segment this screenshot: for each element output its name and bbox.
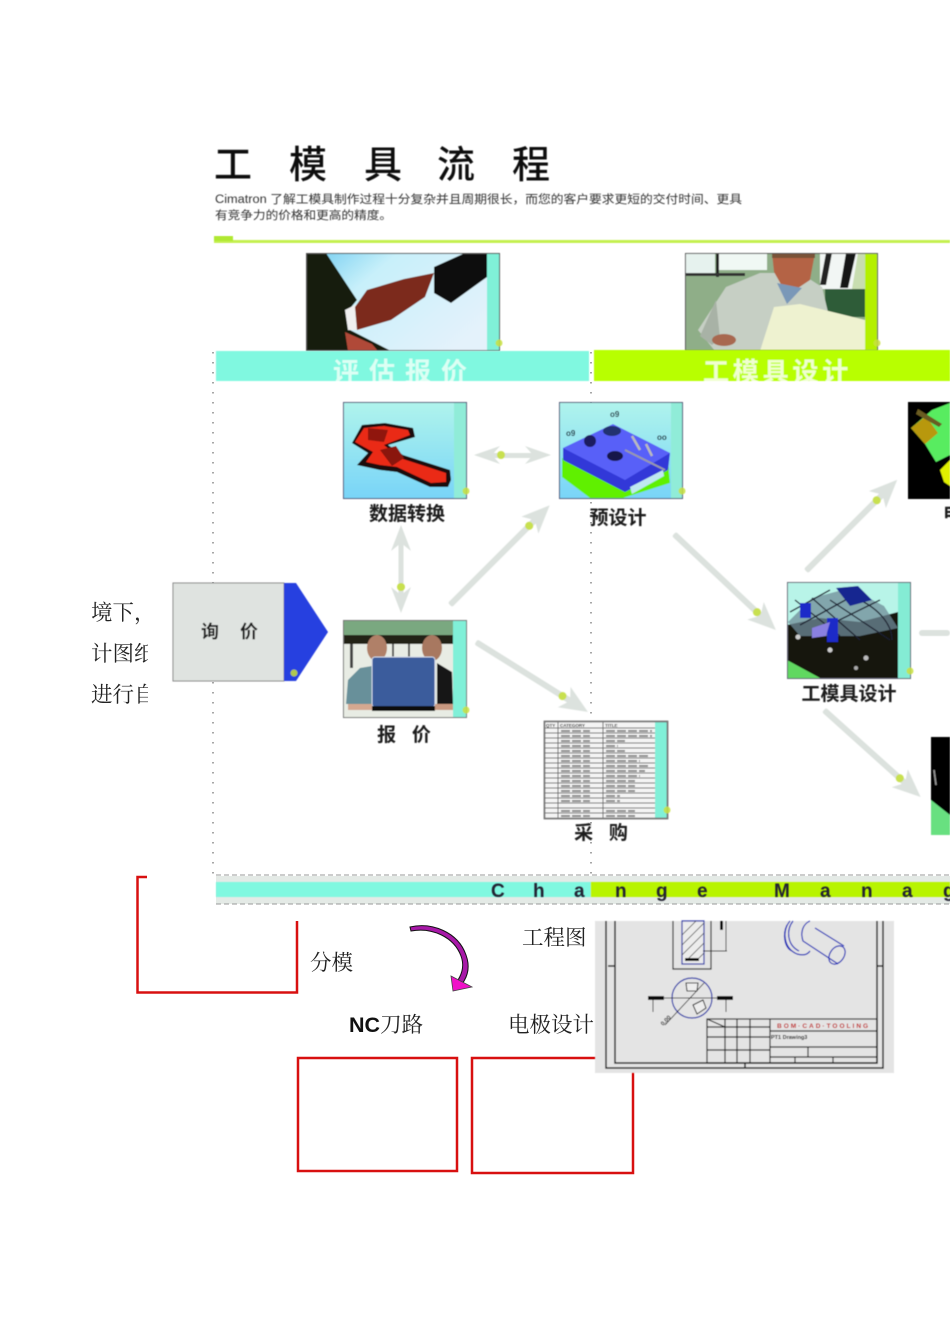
inquiry pentagon: 价 xyxy=(240,622,258,642)
arrow: quote to purchase xyxy=(470,632,594,722)
change management bar: M xyxy=(774,881,790,902)
thumbnail: quotation xyxy=(343,620,470,718)
inquiry body xyxy=(173,583,284,681)
label: mold design: 工模具设计 xyxy=(801,683,897,705)
change management bar: a xyxy=(820,881,831,902)
title: 流 xyxy=(437,145,475,187)
body text fragment left: 计图纸 xyxy=(91,642,156,666)
title: 工 xyxy=(214,145,252,187)
title: 具 xyxy=(364,145,402,187)
isometric bolt view xyxy=(785,921,848,967)
change management bar: e xyxy=(697,881,708,902)
thumbnail: predesign: o9 xyxy=(610,410,620,419)
body text fragment left: 进行自 xyxy=(91,683,156,707)
phase bar: mold design: 工模具设计 xyxy=(703,357,852,387)
thumbnail: data conversion xyxy=(343,402,470,499)
red frame: electrode design xyxy=(472,1058,633,1173)
engineering drawing sheet: BOM·CAD·TOOLING xyxy=(777,1023,870,1030)
red frame: top left xyxy=(138,877,297,992)
thumbnail: lower step, cropped xyxy=(931,737,950,835)
thumbnail: purchasing table xyxy=(544,721,670,819)
thumbnail: purchasing table: CATEGORY xyxy=(560,723,585,728)
change management bar: n xyxy=(615,881,627,902)
title block xyxy=(707,1019,877,1063)
label: predesign: 预设计 xyxy=(589,507,647,529)
photo: handshake xyxy=(306,253,502,351)
inquiry blue arrow tip xyxy=(284,583,328,681)
label: purchasing: 采 购 xyxy=(574,822,628,844)
change management bar xyxy=(216,875,950,904)
phase bar: quotation xyxy=(215,350,590,382)
engineering drawing sheet xyxy=(595,921,894,1073)
thumbnail: purchasing table: TITLE xyxy=(605,723,618,728)
change management bar: h xyxy=(533,881,545,902)
thumbnail: predesign: o9 xyxy=(566,429,576,438)
title: 模 xyxy=(289,145,327,187)
arrow: data to predesign xyxy=(474,446,551,464)
title xyxy=(214,145,550,187)
change management bar: g xyxy=(656,881,668,902)
label: quotation: 报 价 xyxy=(377,724,431,746)
arrow: quote to predesign xyxy=(442,497,558,613)
engineering drawing sheet: PT1 Drawing3 xyxy=(771,1035,807,1041)
photo: designer at computer xyxy=(685,253,880,351)
intro text: Cimatron 了解工模具制作过程十分复杂并且周期很长，而您的客户要求更短的交付时间、更具 xyxy=(215,192,743,206)
change management bar: n xyxy=(861,881,873,902)
dotted phase dividers xyxy=(213,352,591,875)
title: 程 xyxy=(512,145,550,187)
phase bar: mold design xyxy=(593,349,950,382)
change management bar: a xyxy=(902,881,913,902)
section view xyxy=(673,921,727,969)
change management bar: C xyxy=(491,881,505,902)
label: electrode design: 电极设计 xyxy=(508,1013,594,1037)
inquiry pentagon: 询 xyxy=(201,622,219,642)
curved magenta arrow xyxy=(410,926,472,991)
label: NC toolpath: NC刀路 xyxy=(349,1013,423,1037)
arrow: mold design to right xyxy=(919,630,950,636)
label: parting: 分模 xyxy=(310,951,354,975)
thumbnail: predesign xyxy=(559,402,686,499)
circular detail view xyxy=(648,978,733,1027)
arrow: mold design to electrode xyxy=(798,471,906,579)
thumbnail: predesign: oo xyxy=(657,433,667,442)
body text fragment left xyxy=(92,602,148,704)
label: data conversion: 数据转换 xyxy=(369,503,445,525)
thumbnail: electrode, cropped xyxy=(908,402,950,499)
label: engineering drawing: 工程图 xyxy=(522,926,587,950)
thumbnail: mold design xyxy=(787,582,914,679)
red frame: NC toolpath xyxy=(298,1058,457,1171)
arrow: mold design to lower step xyxy=(816,701,929,806)
change management bar: a xyxy=(574,881,585,902)
thumbnail: purchasing table: QTY xyxy=(546,723,555,728)
phase bar: quotation: 评估报价 xyxy=(333,357,477,387)
arrow: data and quote xyxy=(391,525,411,613)
body text fragment left: 境下， xyxy=(91,601,156,626)
inquiry pentagon xyxy=(173,583,328,681)
drawing frame xyxy=(606,921,883,1068)
circular detail view: 0.00 xyxy=(660,1014,673,1027)
green title rule xyxy=(214,236,950,243)
intro text xyxy=(215,192,743,222)
arrow: predesign to mold design xyxy=(666,525,784,639)
intro text: 有竞争力的价格和更高的精度。 xyxy=(215,208,392,222)
